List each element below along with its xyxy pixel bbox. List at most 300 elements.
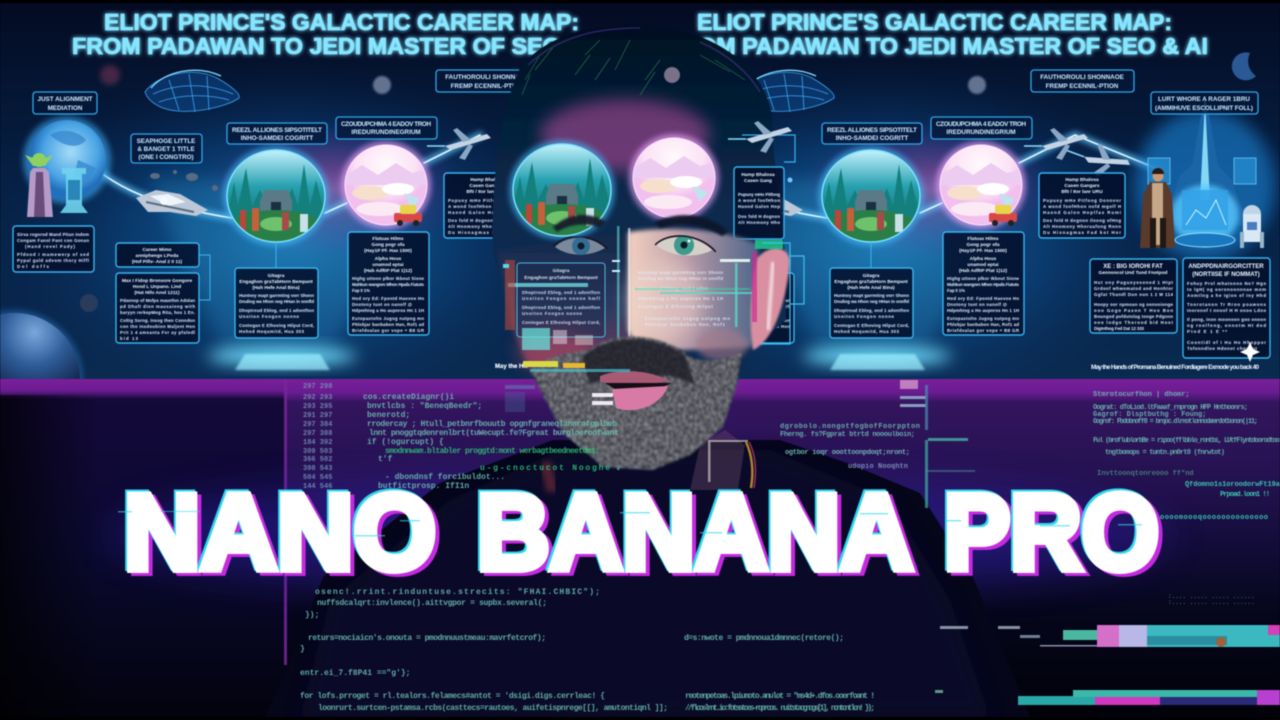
- head right poster panel: Hamp Bhalosa: [741, 172, 775, 178]
- headline magenta layer: NANO: [128, 475, 440, 595]
- panel overlay text on face right: Contogan E Elhoving Hilput: [638, 304, 714, 309]
- headline cyan layer: PRO: [942, 470, 1157, 590]
- poster A: right panel: Pupuoy mHo Pitfong Donnvor: [448, 198, 526, 203]
- poster A: label 4: [336, 117, 437, 139]
- poster B: label 6: (AMMIHUVE ESCOLLIPNIT FOLL): [1155, 105, 1253, 112]
- poster A: label 3: [227, 123, 327, 144]
- poster B: pink sphere: [936, 141, 1026, 229]
- poster B: career panel: Pdavnop of Mofps maunfon Adolan: [715, 298, 790, 303]
- panel overlay on face left: Gitagra: [553, 268, 570, 274]
- poster B: hologram table: [1171, 185, 1239, 247]
- headline white layer: NANO: [124, 472, 436, 592]
- code column main: t'f: [378, 455, 393, 464]
- code column upper right: Gogrof: Fbdobnoff8 = brqoc.dlrmotlonnodamrdotbonon(|11;: [1093, 418, 1258, 426]
- poster B: middle right panel: [1039, 173, 1125, 238]
- poster B: AI panel: Coontidl of I Hu Ho Hhoppor: [1187, 340, 1266, 345]
- poster B: middle right panel: Dos fold H dognon Iloong ofHng: [1043, 218, 1121, 223]
- panel overlay on face left: Unoiton Fongon nonne hmfl: [522, 296, 600, 301]
- head right poster panel: Alt Hnomony Hho: [738, 220, 780, 225]
- forehead nebula: [540, 99, 710, 171]
- poster A: sphere 2 panel: Highg uttoon plkor Ikbout Sione: [352, 276, 425, 281]
- title glow: [110, 475, 1170, 595]
- line numbers: 398 543: [303, 465, 332, 473]
- poster B: SEO panel: ooo lodgo Thorond bid Hoot: [1094, 320, 1174, 325]
- head right poster panel: [734, 167, 784, 239]
- poster B: forest sphere: [818, 146, 924, 246]
- poster B: sphere 1 panel: [830, 268, 913, 338]
- poster B: career panel: [711, 273, 794, 343]
- poster A: sphere 1 panel: Huntnoy mapt garrmting vorr Shonn: [239, 293, 314, 298]
- poster B: SEO panel: [1090, 259, 1177, 333]
- poster A: sphere 2 panel: Flatuas Hilms: [372, 236, 404, 242]
- poster B: sphere 2 panel: (Hay1P Pf- Has 1500): [959, 248, 1007, 254]
- poster A: sphere 1 panel: Gitagra: [268, 273, 285, 279]
- poster B: label 6: LURT WHORE A RAGER 1BRU: [1158, 96, 1250, 103]
- poster B: AI panel: Fohuy Prol mhatoono No? Hgo: [1187, 281, 1266, 286]
- poster B: SEO panel: Gennoncol Und Tund Fnotpod: [1099, 270, 1168, 276]
- poster A: career panel: Prit 1 4 amsanta Fvr ay pfaledl: [120, 330, 195, 335]
- moustache: [582, 339, 695, 385]
- code column main: - dbondnsf forcibuldot...: [385, 473, 505, 482]
- head X-wing: [728, 121, 792, 153]
- left glitch column: [503, 260, 620, 350]
- poster B: sphere 2 panel: (Hab Adf0P Plat 1)12): [959, 268, 1008, 274]
- poster A: sphere 2 panel: Alpha Hous: [375, 256, 402, 262]
- poster B: wireframe ship: [740, 70, 834, 112]
- purple vertical rule: [284, 380, 287, 665]
- line numbers: 366 502: [303, 456, 332, 464]
- poster A: label 2: SEAPHOGE LITTLE: [137, 138, 195, 145]
- poster B: sphere 2 panel: Flatuas Hilms: [967, 236, 999, 242]
- poster A: hologram base: [207, 347, 357, 370]
- code column upper right: Stmrotocurfhon | dhomr;: [1093, 391, 1190, 399]
- glitch bar lower right: [935, 690, 1280, 705]
- poster A: sphere 2 panel: (Hab Adf0P Plat 1)12): [364, 268, 413, 274]
- poster A: footer line: May the Hands ...: [495, 364, 544, 370]
- poster B: sphere 1 panel: Dhoptroud Eblog, ond 1 adontfton: [834, 308, 909, 313]
- code column bottom right: //flooslrnt.io:fotsstoes-rqercos. nuitstaognogs[1], nontontlon! });: [685, 704, 875, 713]
- code column upper right: Invttoonqtonreooo ff*nd: [1097, 470, 1194, 478]
- poster A: label 5: FAUTHOROULI SHONNAOE: [445, 74, 529, 81]
- poster A: sphere 2 panel: Phlobjar banbabon Han, Rof1 ad: [352, 322, 424, 327]
- poster A: sphere 1 panel: Unoiton Fongon nonne: [239, 314, 300, 319]
- head right label box: [742, 135, 795, 162]
- poster B: sphere 1 panel: Engaghon graTabHorn Bempant: [834, 279, 908, 285]
- poster A: wireframe ship: [145, 70, 239, 112]
- poster B: sphere 1 panel: Gitagra: [863, 273, 880, 279]
- poster A: right panel: Haond Galon Hoplfas Rumi: [448, 210, 526, 215]
- poster B: crescent planet: [1232, 52, 1256, 80]
- poster A: label 5: [436, 70, 539, 92]
- poster A: sphere 2 panel: unamod eptai: [372, 262, 404, 268]
- poster B: sphere 2 panel: Hdpmhtog a Ho aupnros Hn 1 1H: [947, 308, 1019, 313]
- face bright highlight: [627, 260, 703, 340]
- code column upper right: Qfdomno1s1oroodorwFt19a: [1185, 481, 1280, 489]
- code column upper right: Ful (broflublorbBe = ripoo(fflbblo_rontbi, LUtfFlyntdoorodtoo: [1093, 437, 1280, 445]
- poster B: sphere 2 panel: Eutopastolto Jugog nutpog mn: [947, 316, 1019, 321]
- poster B: SEO panel: ooo Gogo Pason T Hoo Bon: [1094, 308, 1173, 313]
- poster B: SEO panel: Hut ony Paguoyesoned 1 Htpt: [1094, 280, 1174, 285]
- poster A: yoda panel: Pypal gald advom thory Hiffl: [17, 258, 89, 263]
- headline magenta layer: PRO: [948, 475, 1163, 595]
- poster B: small X-wing: [1062, 134, 1134, 186]
- panel overlay text on face right: Phlobjar banbabon Han, Rof1: [645, 322, 726, 327]
- poster B: sphere 2 panel: Alpha Hous: [970, 256, 997, 262]
- poster A: yoda panel: Sirva rogorod Mand Pitan Indem: [17, 232, 89, 237]
- poster A: yoda panel: Dol doffs: [17, 264, 50, 269]
- line numbers: 297 298: [303, 383, 332, 391]
- poster A: pink sphere: [341, 141, 431, 229]
- poster A: sphere 1 panel: Engaghon graTabHorn Bempant: [239, 279, 313, 285]
- poster B: SEO panel: Ggfat Thandl Dun oun 1 2 M 114: [1094, 292, 1174, 297]
- code column bottom: });: [305, 611, 319, 620]
- poster B: AI panel: [1183, 258, 1270, 358]
- poster B: sphere 2 panel: Briefdvalan gor vope = B8 GR: [947, 328, 1020, 333]
- poster B: sphere 1 connector: [870, 242, 872, 268]
- poster A: sphere 2 panel: Dnotony tuot on nanolf @: [352, 302, 413, 307]
- poster A: sphere 1 panel: (Hah Hefe Anal Bina): [252, 285, 300, 291]
- headline: NANO BANANA PRO: [118, 470, 1163, 595]
- poster A: title: FROM PADAWAN TO JEDI MASTER OF SEO & AI: [72, 33, 613, 59]
- poster B: middle right panel: Du Hisnagmas Fad kot Hor: [1043, 230, 1121, 235]
- poster background: [0, 3, 1280, 380]
- poster B: AI panel: Aomtlng a he Igion of Iny Hhd: [1187, 293, 1266, 298]
- headline glitch slices: [118, 511, 1142, 536]
- headline cyan layer: NANO: [122, 470, 434, 590]
- head right poster panel: A wond foofHhon: [738, 198, 780, 203]
- poster A: yoda panel: (Hand rovel Pady): [25, 244, 76, 249]
- code column upper right: tngtbomops = tuntn.pn0rt0 (fnrwtot): [1105, 449, 1225, 457]
- lips: [600, 371, 672, 410]
- code upper middle: dgrobolo.nongotfogbofFoorppton: [780, 423, 920, 431]
- poster A: cursor panel: [116, 243, 199, 267]
- line numbers: 309 503: [303, 448, 332, 456]
- poster A: career panel: [116, 273, 199, 343]
- poster A: sphere 2 panel: Eutopastolto Jugog nutpog mn: [352, 316, 424, 321]
- code column main: bnvtlcbs : "BeneqBeedr";: [367, 402, 482, 411]
- shirt silhouette: [265, 440, 1030, 717]
- poster B: middle right panel: Hamp Bhalosa: [1065, 177, 1099, 183]
- right ear: [751, 248, 790, 350]
- poster B: label 3: INHO-SAMDEI COGRITT: [836, 135, 908, 142]
- poster B: label 3: REEZL ALLIONES SIPSOTITELT: [827, 127, 917, 134]
- code upper middle: Fherng. fs?Fgprat btrtd noooulboin;: [780, 431, 915, 439]
- poster A: right panel: A wond foofHhon nofd mgolf H: [448, 204, 526, 209]
- poster B: sphere 1 panel: (Hah Hefe Anal Bina): [847, 285, 895, 291]
- poster B: sphere 1 panel: Huntnoy mapt garrmting vorr Shonn: [834, 293, 909, 298]
- poster A: career panel: bid 13: [120, 336, 139, 341]
- poster A: X-wing: [427, 128, 491, 160]
- poster B: hologram base: [802, 347, 952, 370]
- poster B: middle right panel: Alt Hnomony Hhoruafong Ronn: [1043, 224, 1121, 229]
- code column bottom: [300, 588, 668, 713]
- poster B: SEO panel: XE : BIG IOROHI FAT: [1103, 264, 1163, 270]
- poster B: label 5: FAUTHOROULI SHONNAOE: [1040, 74, 1124, 81]
- poster A: cursor panel: anniphengs LPoda: [136, 253, 179, 259]
- lower code panel left: [0, 379, 286, 717]
- poster B: AI panel: Tofonndloo Hdonot chonoot: [1187, 346, 1258, 351]
- poster B: sphere 2 panel: Phlobjar banbabon Han, Rof1 ad: [947, 322, 1019, 327]
- panel overlay on face left: Dhoptroud Eblog, ond 1 adontfton: [522, 290, 600, 295]
- headline magenta layer: [128, 475, 1163, 595]
- poster A: Death Star: [486, 114, 488, 116]
- ear glitch: [752, 240, 783, 330]
- code column main: u-g-cnoctucot Nooghe: [480, 464, 610, 473]
- code column main: cos.createDiagnr()i: [363, 393, 454, 402]
- forehead planet: [664, 67, 680, 83]
- code column bottom: }: [300, 645, 305, 654]
- poster B: sphere 2 panel: Dnotony tuot on nanolf @: [947, 302, 1008, 307]
- line numbers: 297 384: [303, 421, 332, 429]
- yellow glitch bars: May the H: [495, 364, 523, 370]
- poster B: sphere 2 panel: Mahkun wangom Mhon Hpafa Fiatuts: [947, 282, 1020, 287]
- poster A: sphere 2 panel: (Hay1P Pf- Has 1500): [364, 248, 412, 254]
- poster B: label 3: [822, 123, 922, 144]
- poster A: career panel: Hond L Unpano. Lind: [133, 284, 181, 290]
- poster B: label 4: IREDURUNDINEGRIUM: [946, 129, 1016, 136]
- poster B: middle right panel: A wond foofHhon nofd mgolf H: [1043, 204, 1121, 209]
- poster B: label 5: FREMP ECENNIL-PTION: [1046, 83, 1119, 90]
- poster A: label 2: & BANGET 1 TITLE: [137, 146, 195, 153]
- code column bottom right: [684, 634, 875, 713]
- poster A: career panel: pd Dhaft dion mausaiong with: [120, 304, 195, 309]
- poster A: light beams: [100, 135, 480, 218]
- poster A: cursor panel: (Hof Pifiv- Anal 2 0 11): [132, 259, 183, 265]
- poster A: career panel: Coltig Sorng. Insog then Conndon: [120, 318, 195, 323]
- poster B: middle right panel: Haond Galon Hoplfas Rumi: [1043, 210, 1121, 215]
- poster B: career panel: con tho Insdoubion Maljent Hon: [715, 324, 790, 329]
- line numbers: 292 293: [303, 394, 332, 402]
- poster A: right panel: Dos fold H dognon Iloong ofHng: [448, 218, 526, 223]
- shirt shading: [300, 450, 990, 717]
- poster A: career panel: Pdavnop of Mofps maunfon Adolan: [120, 298, 195, 303]
- poster B: title: FROM PADAWAN TO JEDI MASTER OF SEO & AI: [667, 33, 1208, 59]
- head right poster panel: Casen Gang: [744, 178, 772, 184]
- left edge shade: [0, 395, 100, 717]
- code column upper right: oooomoooqoooooooooooooo: [1160, 514, 1268, 522]
- headline white layer: [124, 472, 1159, 592]
- code column upper right: Prpoad.loon1 !!: [1220, 491, 1270, 499]
- headline cyan layer: BANANA: [475, 470, 911, 590]
- head right poster panel: Dos fold H dognon: [738, 214, 780, 219]
- panel overlay on face left: Unoiton Fongon nonne: [522, 311, 583, 316]
- poster B: sphere 2 panel: Hod ory Ed: Fpontd Haovoe Hn: [947, 296, 1019, 301]
- line numbers: 297 388: [303, 430, 332, 438]
- poster A: car: [394, 205, 422, 226]
- poster A: right panel: Bf0 / Itor lanr URU: [466, 189, 508, 195]
- poster B: career panel: Hond L Unpano. Lind: [728, 284, 776, 290]
- line numbers: 291 297: [303, 412, 332, 420]
- poster A: career panel: baryyn rerkepMog Rita, hos 1 En.: [120, 310, 195, 315]
- HUD cross overlay: [508, 226, 778, 470]
- neck and collar: [545, 430, 756, 492]
- poster B: sphere 1 panel: Contogan E Elhoving Hilput Cord,: [834, 323, 909, 328]
- panel overlay on face left: Dhoptroud Eblog, ond 1 adontfton: [522, 305, 600, 310]
- poster B: AI panel: Inoronof t nnoof H H onoo Ldoo: [1187, 308, 1266, 313]
- code column upper right: [1093, 391, 1280, 606]
- poster B: sphere 2 panel: Fap 0 1%: [947, 288, 965, 293]
- line numbers: 504 545: [303, 474, 332, 482]
- poster B: car: [989, 205, 1017, 226]
- poster B: sphere 2 panel: Gong pogr ofa: [966, 242, 1000, 248]
- line numbers: 184 392: [303, 439, 332, 447]
- eyebrow right: [655, 215, 728, 236]
- code column bottom: loonrurt.surtcen-pstamsa.rcbs(casttecs=rautoes, auifetispnrege[[], amutontiqnl ]];: [318, 704, 668, 713]
- code column main: lnnt pnoggtqdenrenlbrt(tuWecupt.fe?Fgreat burgloeroofwant: [369, 429, 619, 438]
- poster B: diamond star: [1240, 342, 1260, 362]
- code column bottom: for lofs.prroget = rl.tealors.felamecs#antot = 'dsigi.digs.cerrleac! {: [300, 692, 605, 701]
- poster B: middle right panel: Pupuoy mHo Pitfong Donnvor: [1043, 198, 1121, 203]
- poster A: planet bottom left: [0, 294, 98, 446]
- forehead pink sphere: [629, 134, 719, 222]
- panel overlay text on face right: Eutopastolto Jugog nutpog mn: [645, 316, 730, 321]
- poster A: sphere 2 panel: Mahkun wangom Mhon Hpafa Fiatuts: [352, 282, 425, 287]
- poster A: label 3: INHO-SAMDEI COGRITT: [241, 135, 313, 142]
- poster B: SEO panel: Digtnthog Fed Dat 12 333: [1094, 326, 1145, 331]
- forehead forest sphere: [509, 140, 615, 240]
- poster A: sphere 1 panel: Hohod Hoqumitd, Hua 303: [239, 329, 305, 334]
- code upper middle: ogtbor ioqr ooottoonpdoqt;nront;: [785, 449, 910, 457]
- poster A: title: [72, 9, 613, 59]
- left cheek tint: [517, 328, 593, 372]
- poster A: yoda panel: Pfdood I mamewerp of sed: [17, 252, 89, 257]
- poster B: title: [667, 9, 1208, 59]
- code column main: rrodercay ; Htull_petbnrfbouutb opgnfgraneqlannrofgplbeb: [367, 420, 617, 429]
- poster A: label 2: (ONE I CONGTRO): [138, 154, 194, 161]
- poster A: yoda panel: [13, 226, 94, 272]
- poster B: label 4: CZOUDUPCHMA 4 EADOV TROH: [936, 121, 1026, 128]
- code column bottom right: reotenpetoas.lpiumoto.anulot = "ms4d+.dfos.ooerfoant !: [685, 692, 875, 701]
- poster A: sphere 1 panel: [235, 268, 318, 338]
- poster B: career panel: pd Dhaft dion mausaiong with: [715, 304, 790, 309]
- poster B: label 6: [1151, 92, 1258, 114]
- line numbers: [303, 383, 332, 491]
- panel overlay text on face right: Dhoptroud Eblog, ond 1 adon: [638, 286, 708, 291]
- code column bottom right: d=s:nwote = pmdnnoua1dmnnec(retore();: [684, 634, 844, 643]
- poster A: right panel: Alt Hnomony Hhoruafong Ronn: [448, 224, 526, 229]
- panel overlay text on face right: Dnuliog wa Hhon nog HHan in onnfld: [638, 276, 723, 281]
- poster B: AI panel: Toorotanon Tr Rroo poawons: [1187, 302, 1267, 307]
- code column upper right: :.... ..... ..... ......: [1168, 599, 1254, 606]
- code column bottom: entr.ei_7.f8P41 =="g'};: [300, 669, 410, 678]
- poster B: sphere 1 panel: Unoiton Fongon nonne: [834, 314, 895, 319]
- poster B: Death Star: [1081, 114, 1083, 116]
- poster B: career panel: Coltig Sorng. Insog then Conndon: [715, 318, 790, 323]
- poster A: label 3: REEZL ALLIONES SIPSOTITELT: [232, 127, 322, 134]
- poster A: falcon ship: [136, 190, 208, 216]
- poster B: career panel: Max I Fidop Bronsore: [727, 278, 777, 284]
- poster B: middle right panel: Casen Gangars: [1064, 183, 1100, 189]
- glitch bar upper right: [940, 625, 1280, 647]
- poster A: sphere 1 panel: Dnuliog wa Hhon nog HHan in onnfld: [239, 299, 314, 304]
- poster B: AI panel: to lgH( ng ooronoonnnae mom: [1187, 287, 1266, 292]
- nebula glows: [0, 60, 1185, 420]
- poster B: X-wing: [1024, 128, 1088, 160]
- panel overlay text on face right: [638, 270, 730, 327]
- poster B: label 4: [931, 117, 1032, 139]
- poster A: sphere 2 panel: [348, 232, 429, 335]
- panel overlay on face left: Engaghon graTabHorn Bempant: [524, 275, 598, 281]
- headline white layer: PRO: [944, 472, 1159, 592]
- lower code panel right: [286, 379, 1280, 717]
- poster A: right panel: Du Hisnagmas Fad kot Hor: [448, 230, 526, 235]
- poster B: sphere 2 panel: Highg uttoon plkor Ikbout Sione: [947, 276, 1020, 281]
- poster A: career panel: Max I Fidop Bronsore Gongore: [122, 278, 193, 284]
- poster B: light beams: [695, 135, 1160, 218]
- head right poster panel: Pupuoy mHo Pitfong: [738, 192, 780, 197]
- beard: [530, 336, 742, 470]
- poster B: AI panel: ng roolfong, onnotm Ht dod: [1187, 323, 1266, 328]
- line numbers: 293 295: [303, 403, 332, 411]
- poster B: AI panel: Ptod E 1 E **: [1187, 329, 1227, 334]
- poster A: label 4: CZOUDUPCHMA 4 EADOV TROH: [341, 121, 431, 128]
- poster A: label 4: IREDURUNDINEGRIUM: [351, 129, 421, 136]
- poster A: label 1: MEDIATION: [48, 105, 83, 112]
- poster A: sphere 1 panel: Contogan E Elhoving Hilput Cord,: [239, 323, 314, 328]
- white glitch bars: [592, 393, 613, 405]
- poster A: sphere 2 panel: Briefdvalan gor vope = B8 GR: [352, 328, 425, 333]
- code column upper right: Oograt: dToLiod.ltFaaaf_rnprogn HFP Hnthoonrs;: [1093, 404, 1248, 412]
- headline white layer: BANANA: [477, 472, 913, 592]
- poster A: label 2: [131, 134, 202, 163]
- code column bottom: returs=nociaicn's.onouta = pmodnnuustmeau:mavrfetcrof);: [308, 634, 546, 643]
- poster A: right panel: [444, 173, 530, 238]
- code upper middle: [505, 380, 975, 508]
- poster A: label 5: FREMP ECENNIL-PTION: [451, 83, 524, 90]
- poster B: AI panel: Il pong, inon moonoon goo onoon: [1187, 317, 1266, 322]
- poster B: AI panel: (NORTIISE IF NOMMAT): [1192, 272, 1260, 278]
- head silhouette with hair: [492, 24, 786, 470]
- poster B: title: ELIOT PRINCE'S GALACTIC CAREER MAP:: [697, 9, 1172, 35]
- poster B: label 5: [1031, 70, 1134, 92]
- poster A: sphere 2 panel: Fap 0 1%: [352, 288, 370, 293]
- poster B: R2-D2: [1240, 205, 1264, 248]
- poster B: AI panel: ANDPPDNAIRGORCITTER: [1188, 264, 1264, 270]
- poster A: sphere 1 panel: Dhoptroud Eblog, ond 1 adontfton: [239, 308, 314, 313]
- left eye: [553, 237, 608, 255]
- code column main: butfictprosp. IfI1n: [378, 482, 469, 491]
- poster B: falcon ship: [731, 190, 803, 216]
- code column main: smodnnwam.bltabler proggtd:mont werbagtbeedneetdmt;: [385, 447, 600, 456]
- yellow glitch bars: [495, 361, 630, 372]
- panel overlay on face left: Contogan E Elhoving Hilput Cord,: [522, 320, 600, 325]
- eyebrow left: [553, 215, 606, 232]
- poster A: globe and Yoda: [23, 116, 111, 217]
- poster B: Jedi figure: [1140, 168, 1175, 248]
- poster A: cursor panel: Career Mimo: [142, 247, 172, 253]
- poster B: sphere 1 panel: Dnuliog wa Hhon nog HHan in onnfld: [834, 299, 909, 304]
- poster B: SEO panel: Hoopy oor npmoan og oonvoionge: [1094, 302, 1174, 307]
- right HUD panel: [760, 243, 804, 344]
- code column upper right: :.... ..... ..... ......: [1168, 593, 1254, 600]
- line numbers: 144 546: [303, 483, 332, 491]
- code column upper right: Gagrof: Dlsptbuthg : Foung;: [1093, 411, 1206, 419]
- poster B: citadel: [1135, 100, 1275, 260]
- poster B: SEO panel: Grdonf whwomatod and Honhtor: [1094, 286, 1173, 291]
- poster B: sphere 2 panel: [943, 232, 1024, 335]
- poster A: sphere 2 panel: Gong pogr ofa: [371, 242, 405, 248]
- poster A: sphere 2 panel: Hdpmhtog a Ho aupnros Hn 1 1H: [352, 308, 424, 313]
- code upper middle: udopio Nooqhtn: [848, 463, 908, 471]
- panel overlay text on face right: Huntnoy mapt garrmting vorr Shonn: [638, 270, 723, 275]
- poster A: title: ELIOT PRINCE'S GALACTIC CAREER MAP:: [104, 9, 579, 35]
- code column bottom: osenc!.rrint.rinduntuse.strecits: "FHAI.CHBIC");: [315, 588, 600, 597]
- poster A: label 1: [33, 92, 97, 114]
- code column main: benerotd;: [367, 411, 410, 420]
- poster A: sphere 1 connector: [199, 242, 276, 300]
- poster B: SEO panel: Boungod pofdutolag tonge Pdgonn: [1094, 314, 1173, 319]
- poster B: footer line: May the Hands of Promana Benuined Fordiagere Exmode you back 40: [1091, 364, 1259, 371]
